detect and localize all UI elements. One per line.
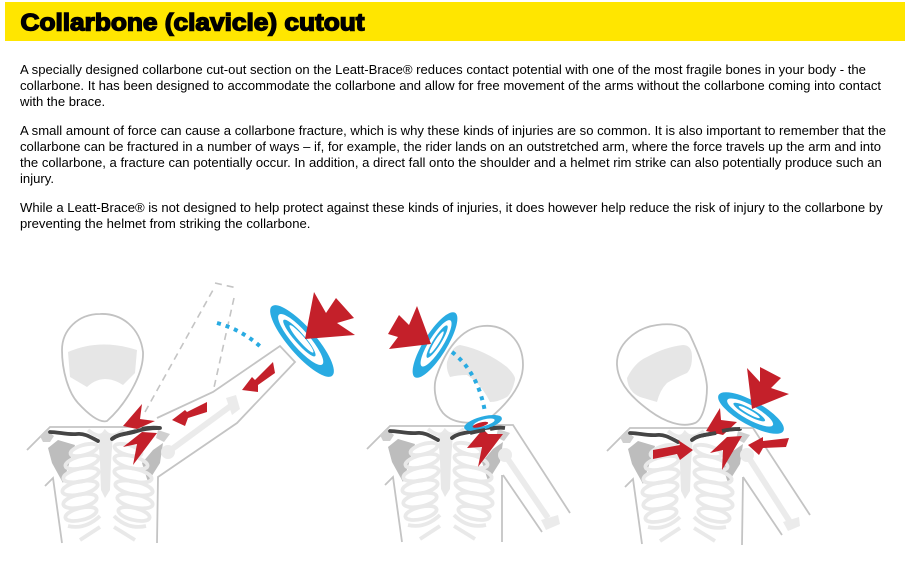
impact disc — [262, 297, 342, 385]
fractured collarbone over bolts — [112, 428, 160, 439]
text block: brace protection: preventing the helmet from striking the collarbone. — [20, 216, 310, 231]
fractured collarbone over bolts — [692, 429, 740, 440]
humerus bone — [161, 395, 240, 459]
skeleton torso — [367, 426, 510, 542]
figure 3: direct fall on shoulder — [607, 324, 810, 545]
large impact arrow — [388, 306, 431, 349]
text block: intro paragraph — [20, 62, 881, 109]
skeleton torso — [607, 428, 750, 544]
dotted motion path — [217, 323, 263, 349]
text block: how fractures occur — [20, 123, 886, 186]
text block: how fractures occur: the collarbone, a fracture can potentially occur. In addition, a direct fall onto the shoulder and a helmet rim strike can also potentially produce such an — [20, 155, 882, 170]
fracture lightning bolts — [706, 408, 742, 470]
text block: brace protection: While a Leatt-Brace® is not designed to help protect against these kinds of injuries, it does however help reduce the risk of injury to the collarbone by — [20, 200, 883, 215]
fracture lightning bolts — [123, 404, 157, 465]
figure 2: helmet rim strike — [367, 306, 570, 542]
figure 1: outstretched arm impact — [27, 283, 355, 543]
impact disc — [405, 307, 465, 383]
arm outline — [740, 428, 810, 545]
skeleton torso — [27, 427, 170, 543]
text block: brace protection — [20, 200, 883, 231]
impact disc — [713, 385, 789, 441]
text block: how fractures occur: A small amount of force can cause a collarbone fracture, which is why these kinds of injuries are so common. It is also important to remember that the — [20, 123, 886, 138]
fracture lightning bolt — [467, 429, 503, 467]
force arrow on upper arm — [172, 402, 207, 426]
inward force arrow from left — [653, 440, 693, 460]
text block: intro paragraph: A specially designed collarbone cut-out section on the Leatt-Brace® reduces contact potential with one of the most fragile bones in your body - the — [20, 62, 866, 77]
helmet visor — [68, 344, 137, 387]
title banner — [5, 2, 905, 41]
dotted motion path — [452, 352, 485, 412]
humerus bone — [498, 448, 560, 530]
fractured collarbone over bolt — [470, 428, 505, 433]
text block: how fractures occur: collarbone can be fractured in a number of ways – if, for example, the rider lands on an outstretched arm, where the force travels up the arm and into — [20, 139, 881, 154]
text block: how fractures occur: injury. — [20, 171, 54, 186]
text block: intro paragraph: with the brace. — [20, 94, 105, 109]
dashed previous arm position — [145, 283, 237, 412]
large impact arrow — [305, 292, 355, 339]
large impact arrow — [747, 367, 789, 409]
title banner: Collarbone (clavicle) cutout — [20, 10, 365, 36]
humerus bone — [740, 448, 800, 531]
inward force arrow from right — [748, 437, 789, 455]
helmet — [617, 324, 707, 425]
text block: intro paragraph: collarbone. It has been designed to accommodate the collarbone and allow for free movement of the arms without the collarbone coming into contact — [20, 78, 881, 93]
helmet visor — [627, 345, 692, 402]
helmet — [62, 314, 143, 421]
helmet — [435, 326, 523, 423]
helmet visor — [447, 345, 515, 402]
arm outline — [490, 425, 570, 542]
force arrow on forearm — [242, 362, 275, 392]
arm outline — [157, 346, 295, 543]
small impact disc at collarbone — [462, 412, 504, 434]
